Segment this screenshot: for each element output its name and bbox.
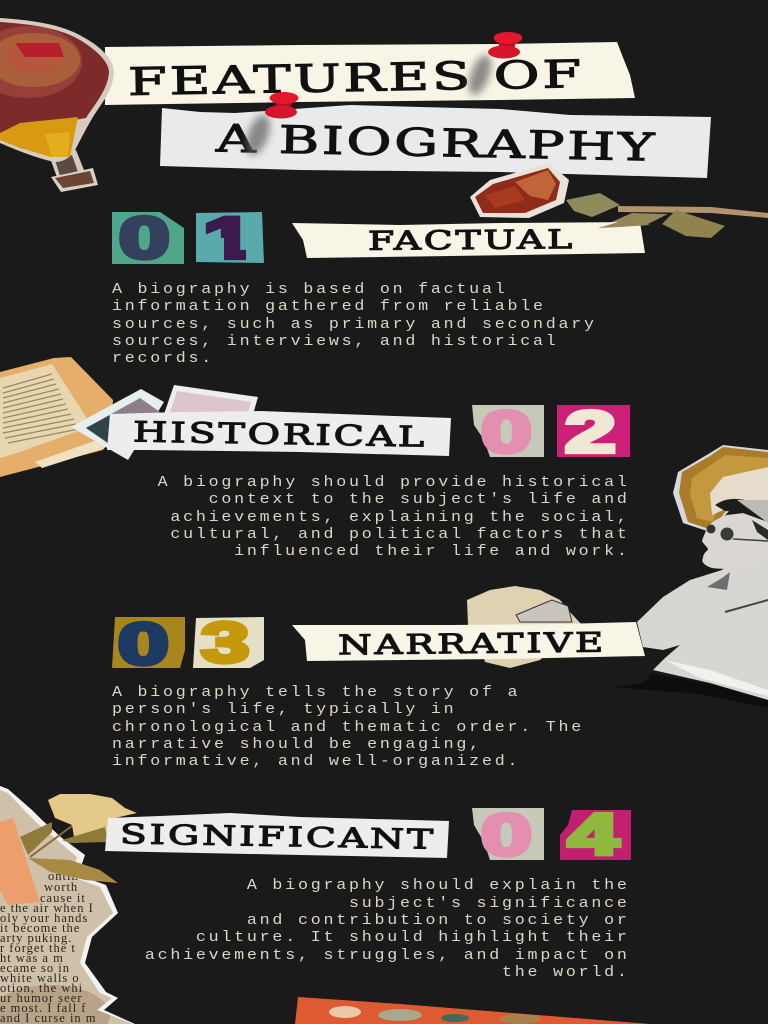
item 2: historical [107, 400, 630, 465]
newspaper collage: it become the [0, 921, 80, 935]
icon: patterned fabric strip [295, 997, 650, 1024]
text: historical description: influenced their life and work. [234, 543, 630, 560]
icon: torn handwritten paper [467, 586, 582, 668]
text: significant description: culture. It should highlight their [196, 929, 630, 946]
number tile: 0 [112, 612, 185, 677]
newspaper collage: worth [44, 880, 78, 894]
text: narrative description: chronological and thematic order. The [112, 719, 584, 736]
heading: a biography: A BIOGRAPHY [214, 116, 657, 170]
text: significant description: A biography should explain the [247, 877, 630, 894]
number tile: 1: 1 [203, 206, 254, 271]
text: factual description [112, 281, 597, 367]
text: historical description [158, 474, 630, 560]
text: narrative description [112, 684, 584, 770]
item 1: factual [112, 206, 645, 271]
icon: dried rose [470, 163, 768, 238]
heading: factual: FACTUAL [368, 225, 575, 257]
text: historical description: achievements, explaining the social, [170, 509, 630, 526]
icon: writing hand [516, 600, 572, 622]
text: historical description: cultural, and political factors that [170, 526, 630, 543]
icon: open book [0, 357, 113, 477]
text: significant description [145, 877, 630, 981]
text: significant description: achievements, struggles, and impact on [145, 947, 630, 964]
icon: woman portrait [612, 499, 768, 708]
newspaper collage: ecame so in [0, 961, 70, 975]
pin: top [488, 32, 522, 58]
newspaper collage: otion, the whi [0, 981, 83, 995]
pin shadow 2 [241, 112, 275, 158]
pin shadow 1 [464, 52, 496, 98]
banner: narrative [292, 622, 645, 661]
text: factual description: information gathered from reliable [112, 298, 546, 315]
banner: significant [105, 813, 449, 858]
number tile: 2 [557, 400, 630, 465]
newspaper collage: white walls o [0, 971, 80, 985]
item 4: significant [105, 802, 631, 868]
heading: historical: HISTORICAL [133, 415, 427, 454]
text: narrative description: narrative should be engaging, [112, 736, 482, 753]
text: significant description: subject's significance [349, 895, 630, 912]
icon: pressed flower [20, 794, 137, 883]
newspaper collage: r forget the t [0, 941, 76, 955]
heading: significant: SIGNIFICANT [120, 819, 436, 856]
newspaper collage: arty puking. [0, 931, 72, 945]
banner: factual [292, 222, 645, 258]
text: significant description: the world. [502, 964, 630, 981]
number tile: 3: 3 [201, 610, 249, 674]
pin: bottom [265, 92, 298, 118]
text: narrative description: A biography tells the story of a [112, 684, 520, 701]
icon: orange paper [0, 818, 40, 905]
number tile: 0: 0 [118, 612, 169, 677]
newspaper collage: e most. I fall f [0, 1001, 86, 1015]
icon: polaroids [71, 385, 258, 460]
heading: features of: FEATURES OF [128, 52, 584, 104]
banner: a biography [160, 105, 711, 178]
number tile: 3 [193, 610, 264, 674]
banner: historical [107, 411, 451, 456]
banner: features of [105, 42, 635, 105]
number tile: 0: 0 [481, 400, 532, 465]
number tile: 2: 2 [565, 400, 616, 465]
icon: gold frame [673, 445, 768, 532]
text: historical description: context to the subject's life and [209, 491, 630, 508]
icon: hot air balloon [0, 18, 114, 192]
text: factual description: records. [112, 350, 214, 367]
text: significant description: and contribution to society or [247, 912, 630, 929]
number tile: 0: 0 [481, 803, 532, 868]
text: historical description: A biography should provide historical [158, 474, 630, 491]
item 3: narrative [112, 610, 645, 677]
newspaper collage [0, 785, 135, 1024]
newspaper collage: e the air when I [0, 901, 94, 915]
text: narrative description: informative, and well-organized. [112, 753, 520, 770]
text: factual description: A biography is based on factual [112, 281, 507, 298]
newspaper collage: cause it [40, 891, 86, 905]
rose leaves over banner [598, 218, 650, 228]
text: narrative description: person's life, typically in [112, 701, 456, 718]
number tile: 0: 0 [119, 206, 170, 271]
newspaper collage: oly your hands [0, 911, 88, 925]
newspaper collage: ht was a m [0, 951, 64, 965]
newspaper collage: ur humor seer [0, 991, 82, 1005]
number tile: 4: 4 [568, 802, 619, 867]
text: factual description: sources, such as primary and secondary [112, 316, 597, 333]
heading: narrative: NARRATIVE [338, 628, 606, 661]
newspaper collage: ontin [48, 869, 79, 883]
text: factual description: sources, interviews, and historical [112, 333, 558, 350]
